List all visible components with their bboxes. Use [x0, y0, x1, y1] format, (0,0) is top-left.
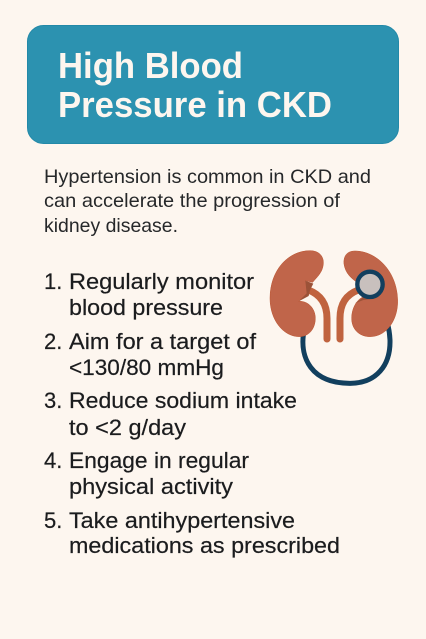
item 5: Take antihypertensive — [69, 508, 295, 533]
icon: right kidney hilum — [355, 295, 375, 303]
icon: stethoscope chest piece — [357, 272, 383, 297]
item 4: physical activity — [69, 474, 233, 499]
item 3: Reduce sodium intake — [69, 388, 297, 413]
item 3 — [44, 388, 297, 440]
numbered list — [44, 269, 340, 558]
icon: left kidney hilum — [299, 281, 313, 301]
item 3: 3. — [44, 388, 62, 413]
item 4: 4. — [44, 448, 62, 473]
icon: ureters — [308, 290, 358, 339]
item 1: blood pressure — [69, 295, 223, 320]
item 2: Aim for a target of — [69, 329, 257, 354]
item 5 — [44, 508, 340, 558]
item 4 — [44, 448, 249, 499]
title: High Blood — [58, 45, 243, 86]
icon: stethoscope tube — [303, 295, 390, 383]
item 5: 5. — [44, 508, 62, 533]
intro text: can accelerate the progression of — [44, 190, 341, 212]
title — [58, 45, 332, 125]
item 3: to <2 g/day — [69, 415, 186, 440]
item 2: 2. — [44, 329, 62, 354]
item 2 — [44, 329, 257, 380]
item 4: Engage in regular — [69, 448, 249, 473]
icon: kidneys with stethoscope — [270, 251, 398, 383]
intro text — [44, 166, 371, 237]
icon: left kidney — [270, 251, 323, 337]
item 1: Regularly monitor — [69, 269, 254, 294]
item 2: <130/80 mmHg — [69, 355, 224, 380]
item 1 — [44, 269, 254, 320]
intro text: Hypertension is common in CKD and — [44, 166, 371, 188]
item 1: 1. — [44, 269, 62, 294]
intro text: kidney disease. — [44, 215, 178, 237]
item 5: medications as prescribed — [69, 533, 340, 558]
title banner — [28, 26, 398, 144]
title: Pressure in CKD — [58, 84, 332, 125]
icon: right kidney — [344, 251, 398, 337]
